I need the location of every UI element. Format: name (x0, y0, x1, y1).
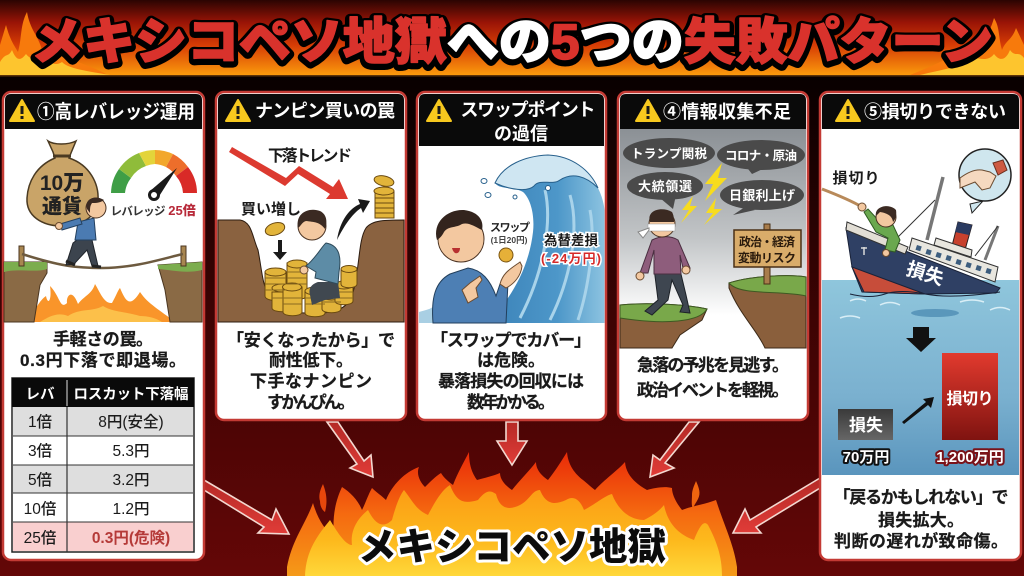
text: description 3: 数年かかる。 (467, 392, 555, 412)
icon: rope (822, 189, 862, 207)
icon: down trend arrow (229, 147, 348, 199)
chart: leverage gauge (110, 150, 197, 218)
chart: stop loss bar (942, 353, 998, 440)
sign: political and economic risk: 政治・経済 (739, 234, 795, 249)
illustration: sinking ship (846, 177, 1000, 296)
bubble: COVID and oil: コロナ・原油 (725, 148, 797, 163)
text: description 4: 政治イベントを軽視。 (637, 381, 789, 400)
label: swap value (490, 221, 530, 245)
text: description 5: 判断の遅れが致命傷。 (834, 531, 1008, 551)
text: description 2: 耐性低下。 (269, 351, 353, 370)
label: exchange loss: 為替差損 (544, 232, 598, 248)
table: leverage and loss-cut range (12, 378, 194, 552)
title: メキシコペソ地獄 への5つの失敗パターン (31, 14, 993, 70)
icon: lightning bolts (681, 163, 727, 225)
table: leverage and loss-cut range: 3.2円 (112, 472, 150, 489)
value: 12,000,000 yen: 1,200万円 (936, 449, 1004, 466)
arrow: pattern 1 to hell (204, 480, 289, 534)
text: description 2 (227, 331, 395, 412)
table: leverage and loss-cut range: 1倍 (28, 413, 53, 431)
table: leverage and loss-cut range: 0.3円(危険) (92, 528, 170, 547)
table: leverage and loss-cut range: 5.3円 (112, 443, 150, 460)
bubble: BOJ rate hike: 日銀利上げ (729, 188, 795, 203)
heading: cannot cut losses (822, 94, 1019, 129)
illustration: big wave (481, 155, 604, 323)
table: leverage and loss-cut range: 25倍 (24, 529, 57, 547)
heading: swap point overconfidence: の過信 (494, 124, 548, 144)
icon: money bag: 通貨 (42, 194, 82, 218)
heading: high leverage (5, 94, 202, 129)
text: description 5: 損失拡大。 (878, 511, 964, 530)
label: buy more: 買い増し (241, 200, 301, 218)
table: leverage and loss-cut range: 3倍 (28, 442, 53, 460)
heading: averaging down: ナンピン買いの罠 (255, 101, 395, 121)
label: swap value: (1日20円) (491, 235, 528, 245)
illustration: cliffs (620, 276, 806, 348)
text: description 4 (637, 355, 789, 400)
chart: leverage gauge: レバレッジ (110, 205, 166, 218)
label: exchange loss: (-24万円) (541, 251, 601, 266)
panel: high leverage (3, 92, 204, 560)
text: description 3: 「スワップでカバー」 (431, 331, 591, 350)
text: description 3 (431, 331, 591, 412)
text: description 2: 「安くなったから」で (227, 331, 395, 350)
icon: big down arrow (906, 327, 936, 352)
figure: man carrying bag (56, 198, 106, 267)
heading: lack of information: ④情報収集不足 (663, 102, 791, 122)
figure: worried man in pit (298, 210, 340, 305)
text: description 5 (834, 488, 1008, 551)
table: leverage and loss-cut range: ロスカット下落幅 (74, 386, 188, 403)
chart: leverage gauge: 25倍 (168, 203, 196, 218)
sign: political and economic risk: 変動リスク (738, 250, 796, 265)
arrow: pattern 2 to hell (327, 422, 373, 477)
heading: swap point overconfidence (419, 94, 604, 146)
label: down trend: 下落トレンド (268, 147, 352, 165)
title band with flames (0, 0, 1024, 76)
text: description 5: 「戻るかもしれない」で (834, 488, 1008, 507)
figure: smiling man with coin (419, 210, 522, 323)
text: description 2: すかんぴん。 (267, 393, 355, 412)
bubble: presidential election: 大統領選 (638, 179, 692, 194)
hell label: メキシコペソ地獄 (358, 527, 666, 569)
panel: lack of information (618, 92, 808, 420)
arrow: pattern 5 to hell (733, 478, 820, 533)
panel: cannot cut losses (820, 92, 1021, 560)
table: leverage and loss-cut range: レバ (26, 387, 55, 403)
table: leverage and loss-cut range: 5倍 (28, 471, 53, 489)
icon: money bag (27, 141, 98, 226)
title band with flames: メキシコペソ地獄への5つの失敗パターン (31, 16, 993, 72)
sign: political and economic risk (734, 224, 801, 284)
heading: swap point overconfidence: スワップポイント (460, 99, 596, 120)
bubble: Trump tariffs (623, 138, 715, 168)
heading: high leverage: ①高レバレッジ運用 (37, 101, 195, 123)
hell flame (287, 452, 737, 576)
icon: growth arrow (902, 397, 934, 424)
heading: averaging down (218, 94, 404, 129)
text: description 3: 暴落損失の回収には (438, 372, 584, 391)
icon: curved up arrow (337, 199, 370, 240)
panel: averaging down (216, 92, 406, 420)
table: leverage and loss-cut range: 8円(安全) (98, 413, 164, 431)
text: description 2: 下手なナンピン (250, 371, 372, 391)
illustration: sea (822, 280, 1019, 475)
text: description 1: 0.3円下落で即退場。 (20, 351, 186, 370)
label: swap value: スワップ (490, 221, 530, 234)
chart: loss bar: 損失 (849, 416, 883, 435)
chart: loss bar (838, 409, 893, 440)
chart: stop loss bar: 損切り (946, 390, 994, 408)
figure: man clinging to ship (858, 203, 900, 256)
bubble: BOJ rate hike (720, 180, 804, 215)
label: exchange loss (541, 232, 601, 266)
table: leverage and loss-cut range: 1.2円 (112, 501, 150, 518)
illustration: storm sky (620, 129, 806, 348)
illustration: cliff, rope and fire (4, 246, 202, 322)
arrow: pattern 4 to hell (650, 422, 699, 477)
text: description 1 (20, 329, 186, 370)
text: description 4: 急落の予兆を見逃す。 (637, 355, 789, 375)
icon: speech bubble with handshake (959, 149, 1011, 213)
text: description 3: は危険。 (477, 351, 545, 370)
bubble: Trump tariffs: トランプ関税 (631, 146, 707, 161)
arrow: pattern 3 to hell (497, 422, 527, 465)
label: stop loss rope: 損切り (832, 169, 880, 187)
heading: cannot cut losses: ⑤損切りできない (864, 102, 1006, 122)
bubble: COVID and oil (717, 140, 805, 174)
table: leverage and loss-cut range: 10倍 (24, 500, 57, 518)
figure: blindfolded man walking (636, 209, 690, 315)
icon: money bag: 10万 (40, 172, 84, 195)
text: description 1: 手軽さの罠。 (53, 329, 153, 349)
illustration: pit with coins (218, 174, 404, 322)
panel: swap point overconfidence (417, 92, 606, 420)
bubble: presidential election (627, 172, 703, 209)
heading: lack of information (620, 94, 806, 129)
icon: small down arrow (273, 240, 287, 260)
illustration: sinking ship: 損失 (904, 258, 946, 290)
value: 700,000 yen: 70万円 (843, 449, 889, 466)
